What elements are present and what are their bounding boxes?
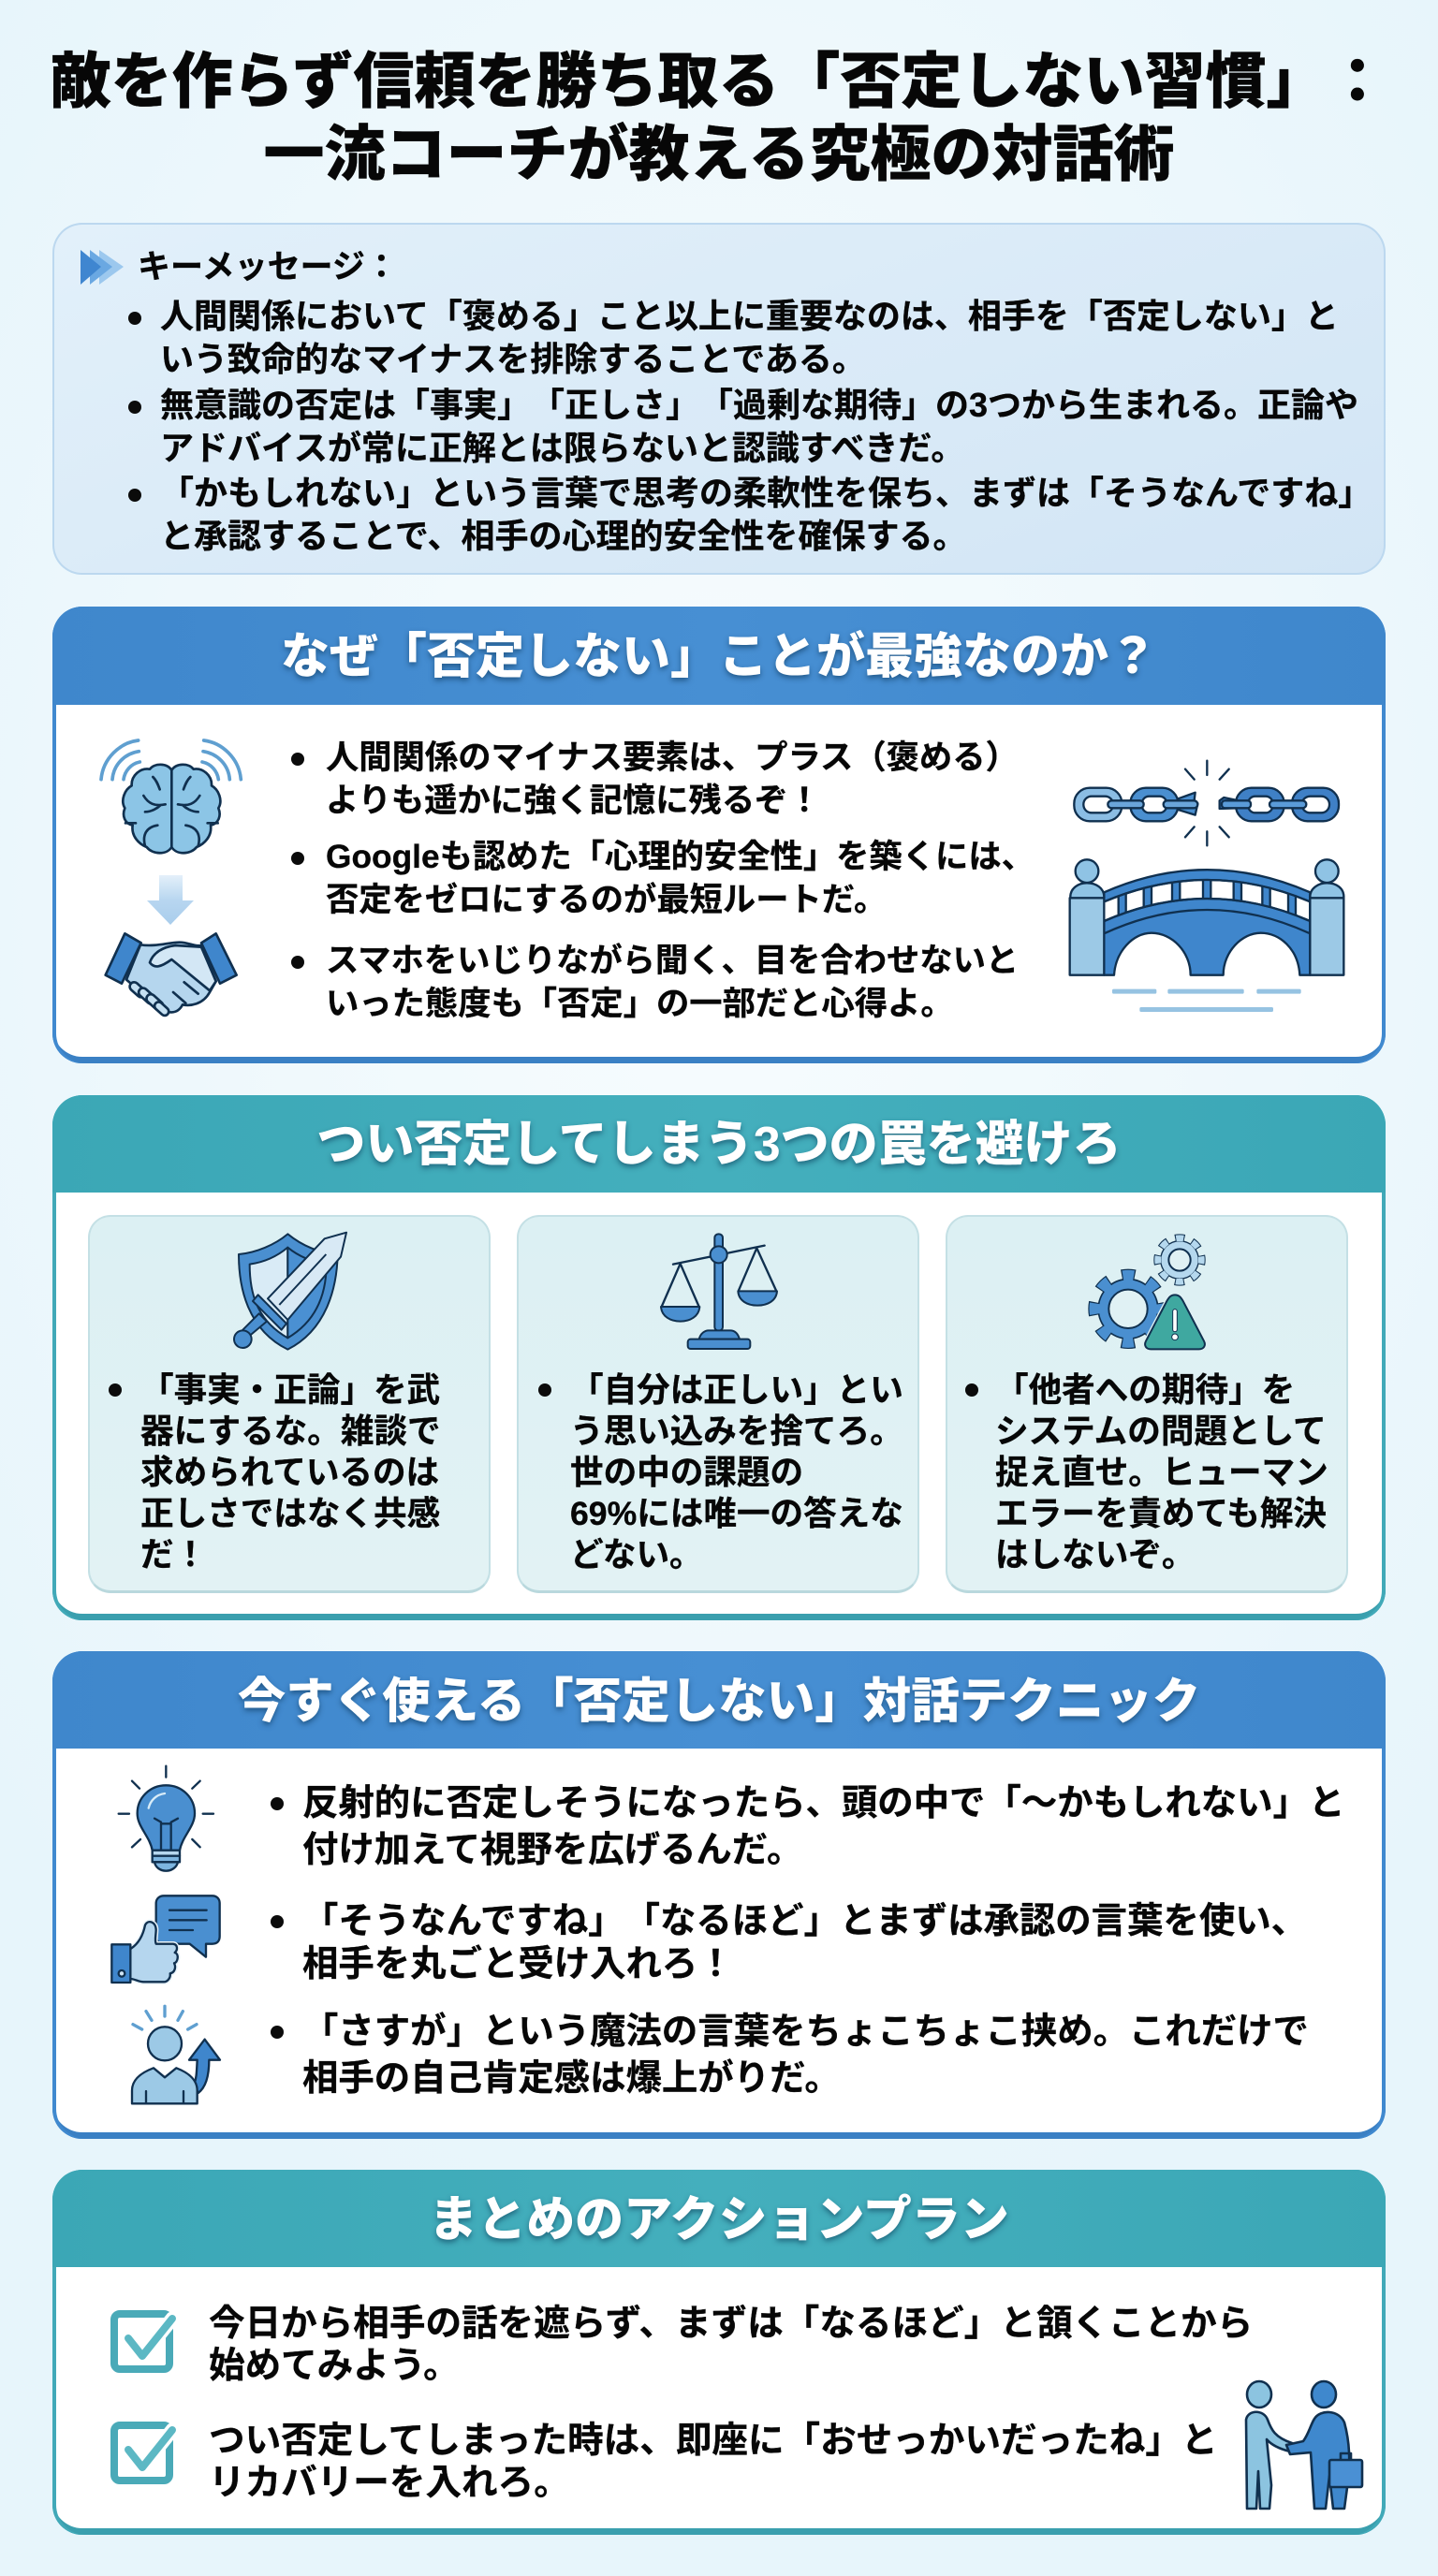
card text: 「事実・正論」を武 xyxy=(140,1371,440,1409)
action item 2: つい否定してしまった時は、即座に「おせっかいだったね」と xyxy=(209,2421,1217,2461)
card text: システムの問題として xyxy=(995,1412,1327,1450)
title: 一流コーチが教える究極の対話術 xyxy=(263,120,1175,188)
section heading: 今すぐ使える「否定しない」対話テクニック xyxy=(238,1674,1200,1728)
icon: thumbs up with speech bubble xyxy=(111,1895,220,1983)
card text: 69%には唯一の答えな xyxy=(570,1495,903,1532)
card: expectations xyxy=(946,1215,1348,1593)
bullet: sasuga: 相手の自己肯定感は爆上がりだ。 xyxy=(302,2058,841,2099)
bullet: attitude xyxy=(291,943,1019,1022)
section heading: なぜ「否定しない」ことが最強なのか？ xyxy=(281,630,1157,684)
panel: three traps xyxy=(52,1095,1386,1620)
icon: checkbox 1 xyxy=(114,2314,172,2369)
panel: action plan xyxy=(52,2170,1386,2535)
bullet: acknowledge: 相手を丸ごと受け入れろ！ xyxy=(302,1944,734,1984)
bullet: negative memories xyxy=(291,739,1019,819)
arrow: down xyxy=(147,875,194,925)
card text: 世の中の課題の xyxy=(570,1454,803,1491)
card: facts xyxy=(88,1215,491,1593)
icon: person with rising arrow xyxy=(132,2006,220,2103)
card text: だ！ xyxy=(140,1536,207,1573)
icon: checkbox 2 xyxy=(114,2425,172,2481)
bullet: key message 1: いう致命的なマイナスを排除することである。 xyxy=(160,340,866,378)
action item 2: リカバリーを入れろ。 xyxy=(209,2463,570,2503)
bullet: key message 1 xyxy=(128,297,1339,378)
icon: balance scale xyxy=(661,1234,777,1349)
title: 敵を作らず信頼を勝ち取る「否定しない習慣」： xyxy=(51,47,1387,115)
card: being right xyxy=(517,1215,919,1593)
bullet: key message 3: 「かもしれない」という言葉で思考の柔軟性を保ち、まずは「そうなんですね」 xyxy=(160,474,1372,512)
card text xyxy=(965,1371,1328,1573)
bullet: sasuga: 「さすが」という魔法の言葉をちょこちょこ挟め。これだけで xyxy=(302,2012,1309,2052)
section heading xyxy=(52,607,1386,705)
bullet: negative memories: よりも遥かに強く記憶に残るぞ！ xyxy=(326,783,821,819)
icon: bridge xyxy=(1070,859,1343,1012)
bullet: kamoshirenai xyxy=(271,1783,1344,1870)
card text: 捉え直せ。ヒューマン xyxy=(995,1454,1328,1491)
card text: 正しさではなく共感 xyxy=(140,1495,440,1532)
action item 1: 始めてみよう。 xyxy=(209,2346,460,2386)
icon: light bulb xyxy=(119,1766,213,1871)
bullet: kamoshirenai: 付け加えて視野を広げるんだ。 xyxy=(302,1830,802,1870)
card text: 「他者への期待」を xyxy=(995,1371,1295,1409)
section heading xyxy=(52,2170,1386,2267)
section heading xyxy=(52,1095,1386,1193)
card text: どない。 xyxy=(570,1536,703,1573)
bullet: attitude: いった態度も「否定」の一部だと心得よ。 xyxy=(326,986,954,1022)
card text xyxy=(109,1371,441,1573)
action item 1: 今日から相手の話を遮らず、まずは「なるほど」と頷くことから xyxy=(209,2304,1253,2344)
bullet: psychological safety xyxy=(291,839,1034,918)
card text: 「自分は正しい」とい xyxy=(570,1371,903,1409)
bullet: key message 2: アドバイスが常に正解とは限らないと認識すべきだ。 xyxy=(160,429,964,467)
bullet: acknowledge: 「そうなんですね」「なるほど」とまずは承認の言葉を使い、 xyxy=(302,1901,1307,1941)
icon: gears and warning xyxy=(1094,1238,1205,1349)
bullet: psychological safety: Googleも認めた「心理的安全性」を築くには、 xyxy=(326,839,1034,875)
bullet: acknowledge xyxy=(271,1901,1307,1984)
card text: う思い込みを捨てろ。 xyxy=(570,1412,903,1450)
section heading: つい否定してしまう3つの罠を避けろ xyxy=(316,1118,1122,1172)
bullet: attitude: スマホをいじりながら聞く、目を合わせないと xyxy=(326,943,1019,979)
bullet: negative memories: 人間関係のマイナス要素は、プラス（褒める） xyxy=(326,739,1019,776)
bullet: sasuga xyxy=(271,2012,1309,2099)
section heading: まとめのアクションプラン xyxy=(429,2193,1009,2247)
section heading xyxy=(52,1651,1386,1749)
panel: techniques xyxy=(52,1651,1386,2139)
title xyxy=(51,47,1387,188)
card text xyxy=(538,1371,903,1573)
card text: 器にするな。雑談で xyxy=(140,1412,441,1450)
icon: handshake xyxy=(106,933,237,1017)
icon: brain with signal arcs xyxy=(101,740,241,853)
bullet: key message 2: 無意識の否定は「事実」「正しさ」「過剰な期待」の3つから生まれる。正論や xyxy=(160,386,1358,424)
bullet: key message 1: 人間関係において「褒める」こと以上に重要なのは、相手を「否定しない」と xyxy=(160,297,1339,335)
bullet: kamoshirenai: 反射的に否定しそうになったら、頭の中で「～かもしれない」と xyxy=(302,1783,1344,1823)
card text: エラーを責めても解決 xyxy=(995,1495,1327,1532)
action item 1 xyxy=(209,2304,1253,2386)
bullet: psychological safety: 否定をゼロにするのが最短ルートだ。 xyxy=(326,882,887,918)
icon: two people shaking hands xyxy=(1246,2381,1362,2509)
card text: はしないぞ。 xyxy=(995,1536,1195,1573)
action item 2 xyxy=(209,2421,1217,2503)
bullet: key message 3 xyxy=(128,474,1372,555)
icon: broken chain xyxy=(1074,761,1339,845)
icon: shield and sword xyxy=(234,1233,346,1350)
panel: key message xyxy=(52,223,1386,575)
key message heading: キーメッセージ： xyxy=(138,249,398,285)
panel: why not denying is strongest xyxy=(52,607,1386,1063)
icon: chevron arrows xyxy=(81,250,124,285)
bullet: key message 3: と承認することで、相手の心理的安全性を確保する。 xyxy=(160,517,966,555)
card text: 求められているのは xyxy=(140,1454,439,1491)
bullet: key message 2 xyxy=(128,386,1358,467)
